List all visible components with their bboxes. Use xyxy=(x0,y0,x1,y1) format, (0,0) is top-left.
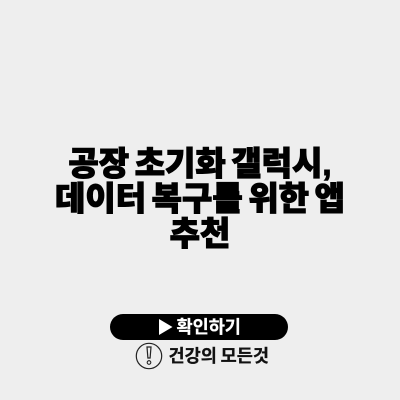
title xyxy=(55,145,345,252)
button label: 확인하기 xyxy=(176,317,241,337)
title: 공장 초기화 갤럭시, xyxy=(68,145,332,182)
icon: exclamation circle xyxy=(136,342,162,370)
brand label: 건강의 모든것 xyxy=(168,346,269,366)
button: confirm xyxy=(110,314,288,340)
icon: play triangle xyxy=(159,319,172,335)
title: 데이터 복구를 위한 앱 xyxy=(55,180,345,217)
title: 추천 xyxy=(170,215,230,252)
